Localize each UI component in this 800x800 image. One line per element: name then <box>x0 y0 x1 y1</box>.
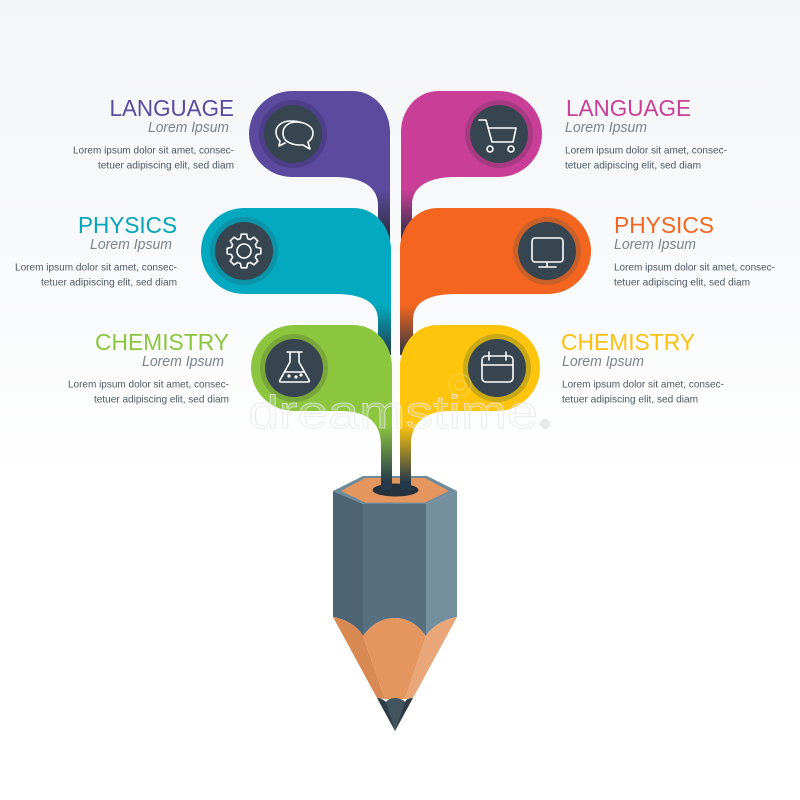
text: chemistry left: Lorem Ipsum <box>142 353 224 370</box>
text: physics right: tetuer adipiscing elit, sed diam <box>614 278 750 288</box>
text: chemistry left: tetuer adipiscing elit, sed diam <box>94 394 229 406</box>
text: physics left: Lorem ipsum dolor sit amet, consec- <box>15 262 177 274</box>
branch: purple language <box>249 91 390 240</box>
icon: gear <box>227 234 261 268</box>
text: language right: tetuer adipiscing elit, sed diam <box>565 160 701 172</box>
watermark: dreamstime <box>248 386 538 438</box>
pencil wood tip <box>333 617 457 699</box>
icon: monitor <box>532 238 563 267</box>
watermark <box>248 374 550 438</box>
text: chemistry left: CHEMISTRY <box>95 329 229 355</box>
text: chemistry right: tetuer adipiscing elit, sed diam <box>562 394 698 406</box>
text: chemistry right: Lorem ipsum dolor sit amet, consec- <box>562 380 724 390</box>
text: language left: LANGUAGE <box>110 95 234 121</box>
branch: teal physics <box>201 208 391 355</box>
icon: calendar <box>482 352 513 382</box>
text: language left: tetuer adipiscing elit, sed diam <box>98 160 234 172</box>
text: chemistry right <box>561 329 724 406</box>
icon: shopping cart <box>479 120 516 152</box>
pencil top <box>333 476 457 504</box>
text: language right: Lorem Ipsum <box>565 119 647 136</box>
text: language right: Lorem ipsum dolor sit amet, consec- <box>565 146 727 156</box>
text: chemistry right: CHEMISTRY <box>561 329 695 355</box>
branch: yellow chemistry <box>400 325 540 490</box>
icon: flask <box>280 352 309 382</box>
text: language right: LANGUAGE <box>566 95 691 121</box>
text: language right <box>565 95 727 172</box>
text: chemistry right: Lorem Ipsum <box>562 353 644 370</box>
text: physics left: Lorem Ipsum <box>90 236 172 253</box>
text: chemistry left: Lorem ipsum dolor sit amet, consec- <box>68 380 229 390</box>
text: physics right: Lorem Ipsum <box>614 236 696 253</box>
branch: orange physics <box>400 208 591 355</box>
text: physics right: Lorem ipsum dolor sit amet, consec- <box>614 262 775 274</box>
text: physics right <box>614 212 775 288</box>
text: language left: Lorem Ipsum <box>148 119 229 136</box>
pencil body <box>333 491 457 636</box>
text: physics left: tetuer adipiscing elit, sed diam <box>41 278 177 288</box>
branch: magenta language <box>401 91 542 240</box>
text: language left <box>73 95 234 172</box>
text: chemistry left <box>68 329 229 406</box>
background <box>0 0 800 480</box>
text: physics left: PHYSICS <box>78 212 177 238</box>
text: physics right: PHYSICS <box>614 212 714 238</box>
pencil <box>333 476 457 731</box>
text: physics left <box>15 212 177 288</box>
text: language left: Lorem ipsum dolor sit amet, consec- <box>73 146 234 156</box>
branch: green chemistry <box>251 325 392 490</box>
pencil lead <box>377 698 413 731</box>
icon: speech bubbles <box>276 121 313 149</box>
